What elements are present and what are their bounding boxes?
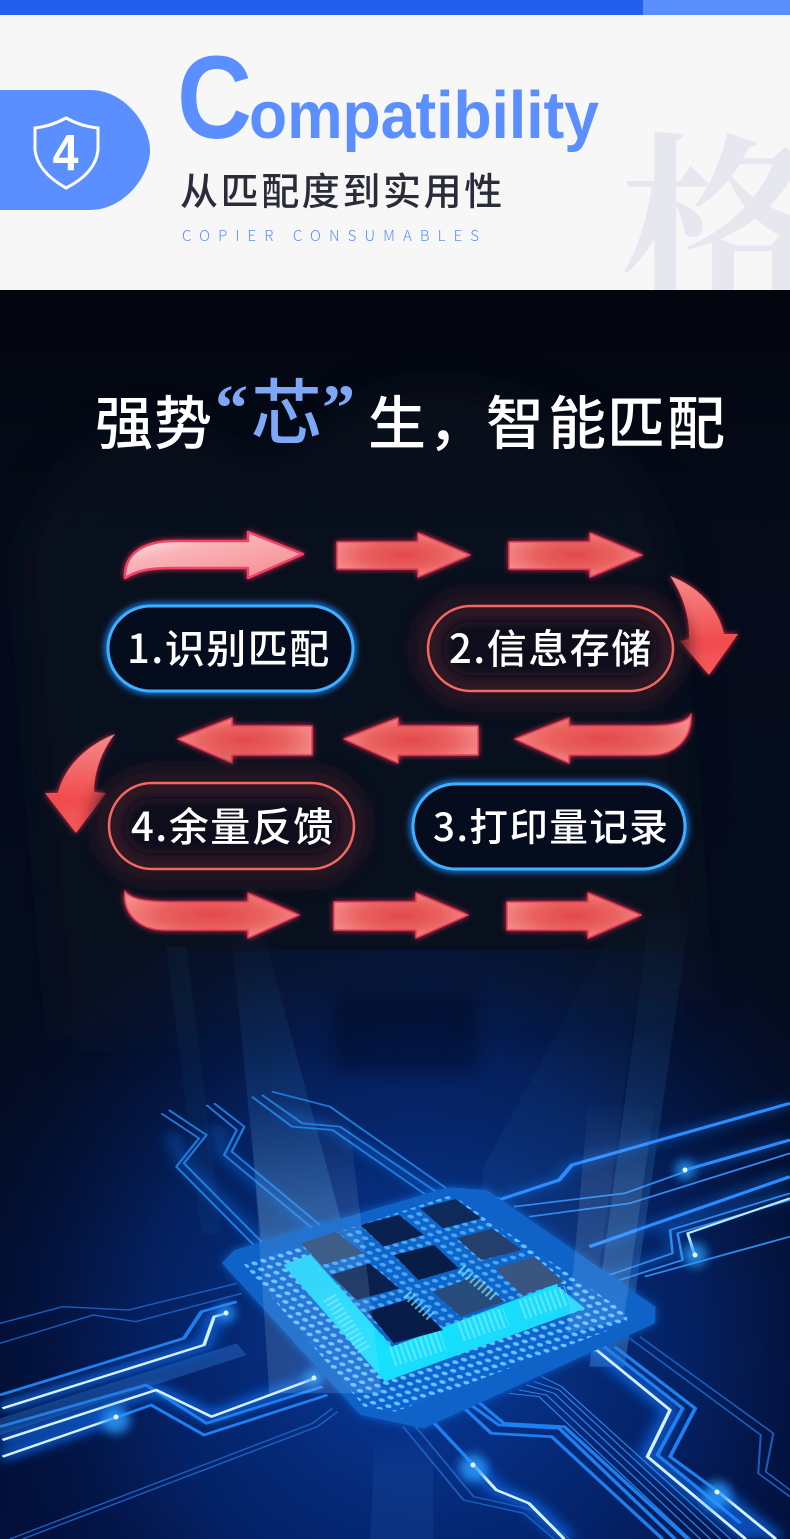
arrow: left 2 — [344, 718, 478, 763]
heading: smart matching: ， — [428, 392, 486, 457]
step 3 pill — [413, 784, 685, 869]
circuit traces: lower — [0, 1283, 790, 1539]
center light column — [370, 1433, 433, 1539]
chip — [222, 1100, 655, 1428]
heading: smart matching: 配 — [667, 392, 725, 457]
step 2 pill — [412, 590, 688, 707]
arrow: curved left — [515, 714, 691, 763]
blue traces — [0, 1302, 741, 1539]
light beams — [166, 913, 690, 1367]
circuit traces: upper — [161, 1092, 790, 1280]
heading: smart matching: 匹 — [607, 392, 665, 457]
heading: smart matching: 势 — [154, 392, 212, 457]
heading: smart matching: 芯 — [251, 375, 322, 454]
inner circuit board — [301, 1197, 562, 1347]
heading: smart matching: 生 — [368, 392, 426, 457]
step 4 pill — [93, 767, 370, 885]
chip substrate — [222, 1187, 655, 1428]
chip halo — [222, 1187, 655, 1428]
illuminated base plate — [283, 1200, 585, 1382]
fine traces — [0, 1283, 790, 1539]
arrow: curved right — [125, 891, 299, 938]
subtitle: 从匹配度到实用性 — [180, 172, 505, 214]
flow: arrows row 1 — [125, 532, 642, 578]
section number tab — [0, 90, 150, 210]
tagline: COPIER CONSUMABLES — [182, 225, 479, 246]
arrow: right 5 — [334, 893, 468, 938]
icon: shield with number 4: 4 — [52, 124, 79, 181]
beam overlay on chip — [250, 1100, 655, 1393]
step 2 pill: 2.信息存储 — [449, 617, 653, 675]
glow layer — [0, 1313, 776, 1539]
step 4 pill: 4.余量反馈 — [131, 795, 335, 853]
panel: header — [0, 0, 790, 290]
heading: smart matching: ” — [322, 372, 355, 445]
arrow: right 2 — [337, 533, 470, 577]
chip squares — [301, 1199, 564, 1343]
arrow: right 3 — [509, 533, 642, 577]
icon: shield with number 4 — [35, 118, 98, 188]
title: Compatibility: ompatibility — [249, 78, 599, 153]
step 3 pill: 3.打印量记录 — [433, 797, 669, 853]
flow: arrows row 3 — [125, 891, 641, 938]
flow: arrows row 2 — [178, 714, 691, 763]
chip pins — [329, 1267, 568, 1357]
arrow: curved start — [125, 532, 303, 578]
title: Compatibility — [177, 32, 599, 164]
circuit sparkle nodes — [102, 1160, 731, 1509]
arrow: curved down right — [670, 576, 738, 675]
arrow: left 1 — [178, 718, 312, 763]
step 1 pill: 1.识别匹配 — [127, 617, 331, 675]
heading: smart matching: “ — [215, 372, 248, 445]
dotted pad field — [243, 1195, 627, 1412]
heading: smart matching: 智 — [486, 392, 544, 457]
title: Compatibility: C — [177, 32, 252, 164]
arrow: curved down left — [45, 734, 115, 833]
top accent bar — [0, 0, 790, 15]
ribbon — [509, 1377, 731, 1539]
heading: smart matching: 能 — [548, 392, 606, 457]
heading: smart matching: 强 — [95, 392, 153, 457]
wide translucent bus — [0, 1343, 247, 1435]
bright cores — [3, 1313, 776, 1539]
arrow: right 6 — [507, 893, 641, 938]
step 1 pill — [108, 606, 353, 691]
inner board dots — [301, 1197, 562, 1347]
heading: smart matching — [95, 372, 725, 457]
